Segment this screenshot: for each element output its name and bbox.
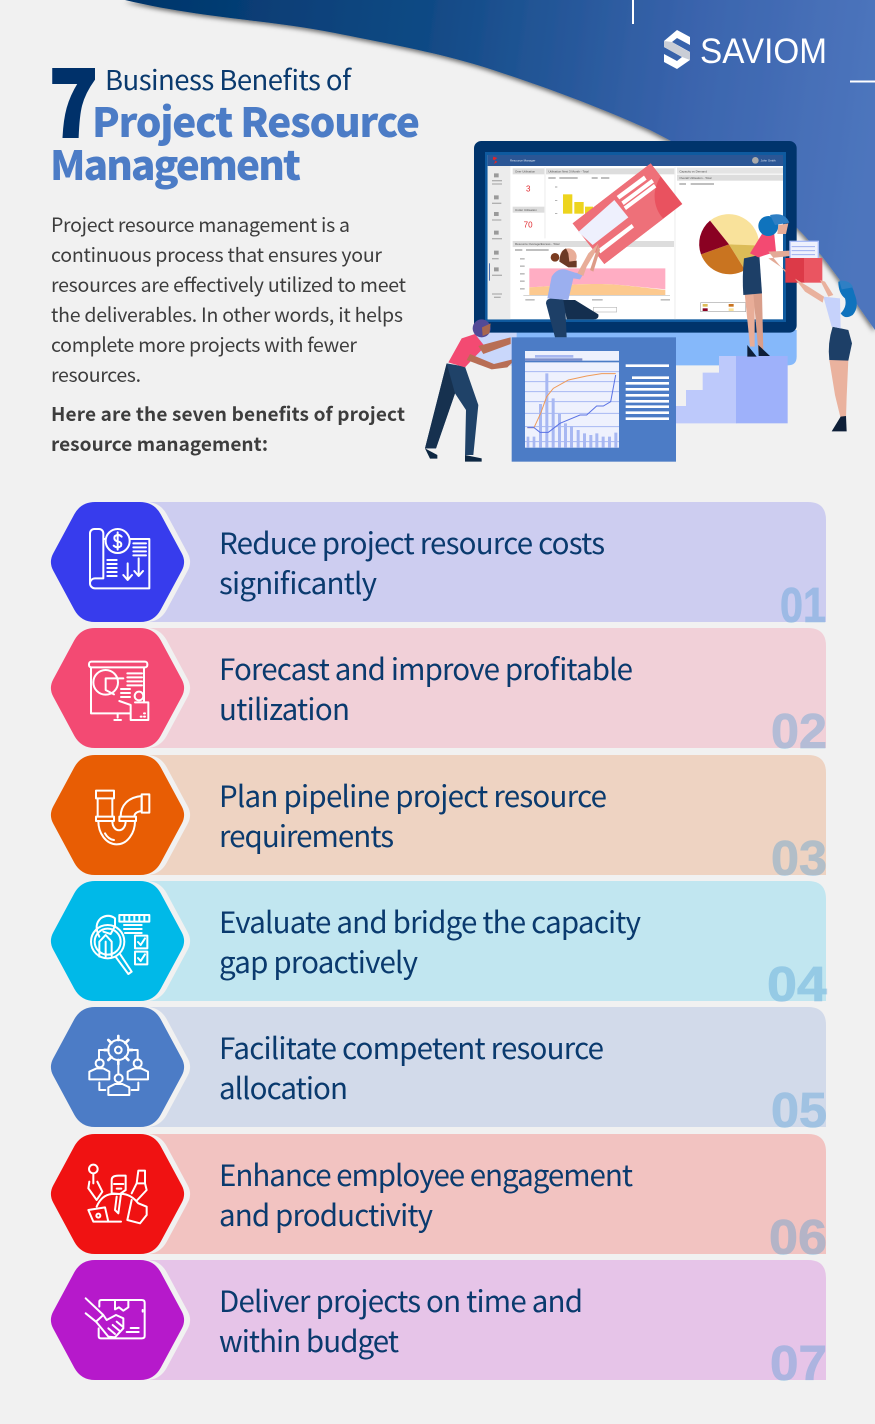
panel: benefit 1: [51, 502, 826, 633]
heading: Deliver projects on time and: [219, 1279, 583, 1321]
heading: Reduce project resource costs: [219, 521, 605, 563]
number 05: 05: [771, 1084, 827, 1138]
icon: pipe: [96, 791, 149, 844]
intro text: resources are effectively utilized to meet: [51, 269, 407, 298]
panel: benefit 5: [51, 1007, 827, 1138]
intro text: complete more projects with fewer: [51, 329, 357, 358]
intro text: continuous process that ensures your: [51, 239, 382, 268]
panel: benefit 5: allocation: [219, 1066, 348, 1108]
floating pink document: [573, 163, 682, 264]
title line 3: Management: [50, 133, 301, 192]
person: woman pushing left: [425, 319, 517, 462]
heading: Facilitate competent resource: [219, 1026, 604, 1068]
panel: benefit 3: [51, 755, 827, 886]
icon: gear and team: [89, 1036, 148, 1095]
number 06: 06: [769, 1211, 827, 1265]
card: [150, 628, 826, 748]
heading: Forecast and improve profitable: [219, 647, 633, 689]
number 01: 01: [780, 579, 826, 633]
intro text: Project resource management is a: [51, 209, 350, 238]
icon: magnifier on candidate: [91, 915, 149, 974]
monitor: Utilisation Next 3 Month - Total: [548, 170, 589, 174]
monitor: John Smith: [761, 159, 776, 163]
title: [49, 29, 420, 192]
number 02: 02: [771, 705, 827, 759]
panel: benefit 4: gap proactively: [219, 940, 418, 982]
icon: S logo mark: [664, 30, 690, 69]
intro text: resources.: [51, 359, 141, 388]
person: woman receiving box: [795, 279, 857, 431]
person: woman on steps with box: [743, 214, 795, 357]
monitor: Resource Overage/Excess - Total: [515, 242, 560, 246]
monitor: 3: [526, 184, 531, 193]
monitor: Under Utilisation: [515, 208, 537, 212]
number 03: 03: [771, 832, 827, 886]
logo: [633, 0, 875, 82]
icon: multitasking employee: [88, 1165, 147, 1223]
heading: Plan pipeline project resource: [219, 774, 607, 816]
panel: benefit 3: requirements: [219, 814, 394, 856]
icon: cost document: [90, 529, 149, 588]
panel: benefit 1: significantly: [219, 561, 377, 603]
person: man lifting document: [546, 243, 600, 337]
chart panel: [512, 337, 676, 462]
intro text: [51, 209, 407, 457]
pie chart: [699, 214, 759, 312]
illustration: monitor and team: [425, 141, 857, 462]
panel: benefit 6: and productivity: [219, 1193, 433, 1235]
panel: benefit 2: utilization: [219, 687, 350, 729]
card: [150, 502, 826, 622]
header band: [125, 0, 875, 330]
intro text: the deliverables. In other words, it helps: [51, 299, 403, 328]
card: [150, 1260, 826, 1380]
card: [150, 755, 826, 875]
monitor: Capacity vs Demand: [679, 169, 707, 173]
panel: benefit 7: within budget: [219, 1319, 399, 1361]
monitor: [474, 141, 797, 365]
title line 1: Business Benefits of: [105, 58, 352, 98]
icon: delivery handshake: [86, 1298, 145, 1338]
icon: presentation board: [89, 662, 148, 720]
card: [150, 1134, 826, 1254]
logo wordmark: SAVIOM: [700, 32, 827, 71]
panel: benefit 4: [51, 881, 827, 1012]
monitor: Overall Utilisation - Total: [679, 176, 712, 180]
panel: benefit 2: [51, 628, 827, 759]
box with papers: [785, 241, 822, 283]
card: [150, 1007, 826, 1127]
title numeral 7: 7: [49, 29, 98, 165]
intro text: Here are the seven benefits of project: [51, 400, 405, 427]
heading: Evaluate and bridge the capacity: [219, 900, 641, 942]
steps: [676, 356, 788, 423]
monitor: Resource Manager: [510, 159, 535, 163]
number 07: 07: [770, 1337, 827, 1391]
title line 2: Project Resource: [92, 90, 420, 149]
number 04: 04: [767, 958, 827, 1012]
panel: benefit 6: [51, 1134, 827, 1265]
card: [150, 881, 826, 1001]
panel: benefit 7: [51, 1260, 827, 1391]
heading: Enhance employee engagement: [219, 1153, 633, 1195]
intro text: resource management:: [51, 430, 268, 457]
monitor: Over Utilisation: [515, 170, 536, 174]
monitor: 70: [524, 220, 533, 229]
